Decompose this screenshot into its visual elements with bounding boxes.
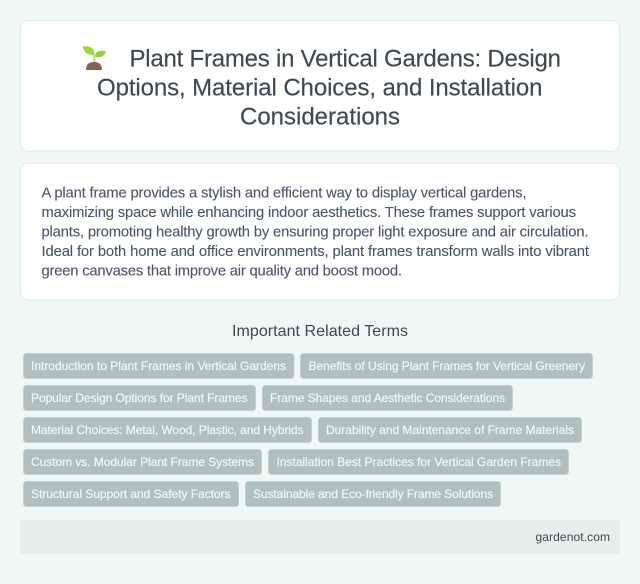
heading: important related terms: Important Related Terms [232,323,408,340]
tag: Custom vs. Modular Plant Frame Systems [31,455,254,469]
tag [268,450,568,474]
summary text: Ideal for both home and office environments, plant frames transform walls into vibrant [42,244,589,260]
title panel [20,20,620,151]
tag: Structural Support and Safety Factors [31,487,230,501]
summary text: A plant frame provides a stylish and efficient way to display vertical gardens, [42,186,526,202]
summary text: plants, promoting healthy growth by ensuring proper light exposure and air circulation. [42,224,588,240]
tag [24,450,262,474]
icon: seedling [82,46,106,70]
summary text: green canvases that improve air quality and boost mood. [42,264,402,280]
tag: Frame Shapes and Aesthetic Considerations [270,391,505,405]
summary panel [20,163,620,300]
tag [246,482,500,506]
tag: Sustainable and Eco-friendly Frame Solutions [253,487,493,501]
summary text [42,186,589,280]
title text: Considerations [240,104,400,131]
title text: Options, Material Choices, and Installation [97,75,542,102]
tag: Benefits of Using Plant Frames for Vertical Greenery [308,359,585,373]
tag [262,386,512,410]
tag [300,354,592,378]
tag: Introduction to Plant Frames in Vertical Gardens [31,359,286,373]
footer source text: gardenot.com [536,530,610,544]
tag [24,418,312,442]
tag [24,354,294,378]
title text [97,46,561,131]
tag: Installation Best Practices for Vertical Garden Frames [276,455,561,469]
tag: Material Choices: Metal, Wood, Plastic, and Hybrids [31,423,304,437]
summary text: maximizing space while enhancing indoor aesthetics. These frames support various [42,205,576,221]
tag: Popular Design Options for Plant Frames [31,391,248,405]
tag [318,418,582,442]
tag [24,386,256,410]
footer bar [20,520,620,554]
related terms tags [24,354,592,506]
title text: Plant Frames in Vertical Gardens: Design [130,46,561,73]
tag [24,482,238,506]
tag: Durability and Maintenance of Frame Materials [326,423,574,437]
